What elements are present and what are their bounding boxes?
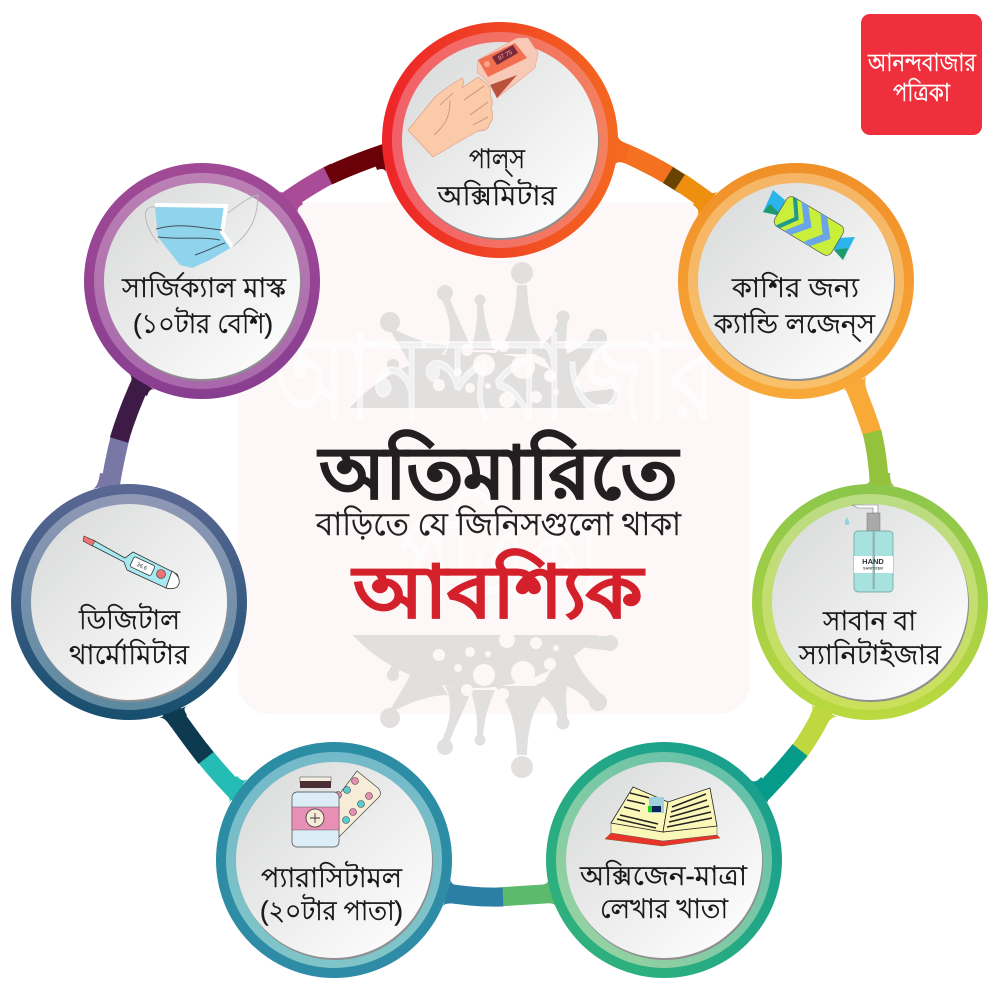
label: soap or sanitizer: সাবান বা xyxy=(822,606,917,636)
label: candy lozenge: ক্যান্ডি লজেন্‌স xyxy=(713,308,876,342)
label: pulse oximeter: পাল্স xyxy=(469,144,526,177)
connector: slate to purple xyxy=(92,374,155,500)
circle: soap or sanitizer xyxy=(752,484,988,720)
icon: pill bottle and blister pack xyxy=(292,771,380,847)
label: candy lozenge xyxy=(713,272,876,342)
connector: teal to slate xyxy=(159,702,247,803)
circle: pulse oximeter xyxy=(382,22,618,258)
label: oxygen level notebook: লেখার খাতা xyxy=(600,894,729,924)
label: pulse oximeter: অক্সিমিটার xyxy=(436,179,558,211)
connectors between circles xyxy=(92,133,895,907)
label: oxygen level notebook xyxy=(579,860,748,924)
label: paracetamol: প্যারাসিটামল xyxy=(261,861,403,893)
label: surgical mask: (১০টার বেশি) xyxy=(133,307,273,339)
label: soap or sanitizer xyxy=(798,606,942,670)
label: paracetamol xyxy=(260,861,403,926)
circle: candy lozenge xyxy=(678,163,914,399)
watermark wordmark: পত্রিকা xyxy=(400,489,601,626)
icon: pulse oximeter on finger xyxy=(408,38,538,157)
logo: Anandabazar Patrika: আনন্দবাজার xyxy=(867,49,977,77)
label: surgical mask: সার্জিক্যাল মাস্ক xyxy=(121,272,287,303)
icon: thermometer: 36.6 xyxy=(135,562,148,572)
label: surgical mask xyxy=(121,272,287,339)
label: digital thermometer: থার্মোমিটার xyxy=(69,638,190,670)
subtitle: বাড়িতে যে জিনিসগুলো থাকা xyxy=(315,505,682,542)
connector: green to teal-green xyxy=(751,705,838,804)
heading: essential: আবশ্যিক xyxy=(350,548,645,633)
title: atimarite: অতিমারিতে xyxy=(316,429,681,514)
icon: thermometer xyxy=(83,536,179,589)
connector: red to orange xyxy=(605,133,718,216)
icon: surgical mask xyxy=(145,195,258,268)
circle: surgical mask xyxy=(84,163,320,399)
label: pulse oximeter xyxy=(436,144,558,211)
watermark wordmark: আনন্দবাজার xyxy=(270,312,718,446)
label: digital thermometer: ডিজিটাল xyxy=(78,603,181,635)
label: oxygen level notebook: অক্সিজেন-মাত্রা xyxy=(579,860,748,891)
virus watermark xyxy=(350,262,618,778)
panel: centre background xyxy=(350,262,618,778)
label: candy lozenge: কাশির জন্য xyxy=(731,272,860,303)
logo: Anandabazar Patrika: পত্রিকা xyxy=(893,78,951,107)
icon: open book xyxy=(605,787,720,846)
label: soap or sanitizer: স্যানিটাইজার xyxy=(798,638,942,670)
icon: hand sanitizer bottle xyxy=(845,505,893,592)
watermark wordmark xyxy=(270,312,718,626)
label: paracetamol: (২০টার পাতা) xyxy=(260,894,403,926)
icon: hand sanitizer bottle: SANITIZER xyxy=(863,566,883,570)
circle: oxygen level notebook xyxy=(546,742,782,978)
connector: purple to red xyxy=(275,143,395,213)
connector: orange to green xyxy=(842,376,895,500)
circle: digital thermometer xyxy=(11,484,247,720)
connector: teal-green to teal xyxy=(440,879,560,907)
icon: hand sanitizer bottle: HAND xyxy=(862,557,884,566)
label: digital thermometer xyxy=(69,603,190,670)
icon: candy xyxy=(763,190,855,260)
icon: pulse oximeter on finger: 97 75 xyxy=(497,50,514,62)
logo: Anandabazar Patrika xyxy=(861,14,982,135)
circle: paracetamol xyxy=(216,742,452,978)
